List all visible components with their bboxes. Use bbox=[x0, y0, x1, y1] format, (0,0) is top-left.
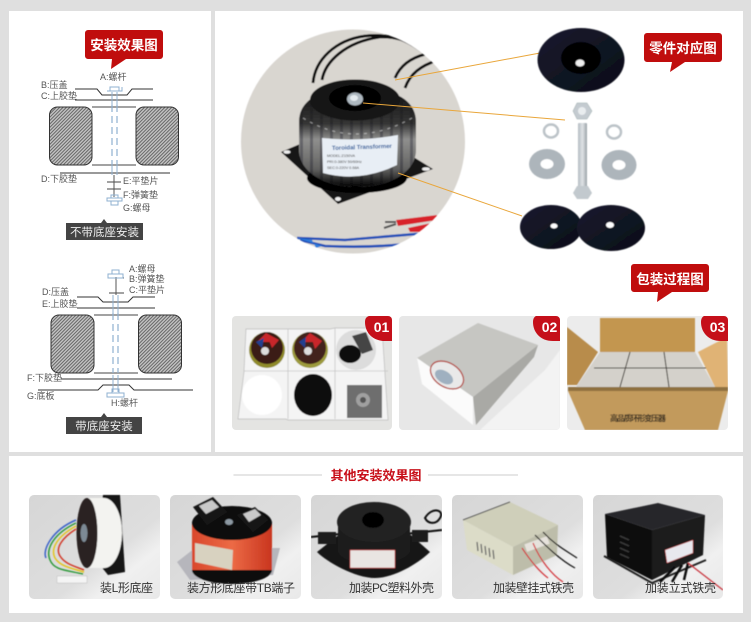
callout: 零件对应图: 零件对应图 bbox=[649, 40, 717, 56]
diagram: installation without base bbox=[41, 71, 178, 213]
diagram: installation with base: F:下胶垫 bbox=[27, 372, 62, 383]
diagram: installation without base: B:压盖 bbox=[41, 79, 68, 90]
diagram: installation without base: C:上胶垫 bbox=[41, 90, 77, 101]
section heading: 其他安装效果图 bbox=[330, 468, 422, 483]
card: L bracket bbox=[29, 495, 160, 599]
photo: toroidal transformer in circle bbox=[241, 30, 465, 254]
card: upright iron case bbox=[593, 495, 723, 599]
diagram: installation with base: A:螺母 bbox=[129, 264, 156, 274]
diagram: installation with base: G:底板 bbox=[27, 390, 55, 401]
packaging photo 03: carton with boxes bbox=[567, 316, 728, 430]
diagram: installation with base: C:平垫片 bbox=[129, 284, 165, 295]
card: PC plastic housing bbox=[311, 495, 442, 599]
diagram: installation with base bbox=[27, 264, 193, 408]
diagram: installation without base: G:螺母 bbox=[123, 203, 151, 213]
packaging photo 01: foam tray: 01 bbox=[374, 319, 389, 335]
packaging photo 02: sealed white box bbox=[399, 316, 560, 430]
packaging photo 03: carton with boxes: 03 bbox=[710, 319, 725, 335]
leader lines bbox=[363, 53, 565, 216]
callout: 安装效果图 bbox=[85, 30, 163, 69]
card: PC plastic housing: 加装PC塑料外壳 bbox=[349, 580, 434, 595]
panel: installation diagrams bbox=[9, 11, 211, 452]
diagram: installation without base: D:下胶垫 bbox=[41, 173, 77, 184]
callout: 零件对应图 bbox=[644, 33, 722, 72]
card: wall-mounted iron case bbox=[452, 495, 583, 599]
packaging photo 01: foam tray bbox=[232, 316, 392, 430]
card: square base with TB terminals: 装方形底座带TB端子 bbox=[187, 580, 295, 595]
label: 带底座安装: 带底座安装 bbox=[75, 419, 133, 433]
diagram: installation with base: B:弹簧垫 bbox=[129, 273, 165, 284]
label: 带底座安装 bbox=[66, 413, 142, 434]
diagram: installation with base: E:上胶垫 bbox=[42, 298, 78, 309]
label: 不带底座安装: 不带底座安装 bbox=[70, 225, 139, 239]
packaging photo 03: carton with boxes: 高品质环形变压器 bbox=[610, 413, 666, 423]
diagram: installation without base: E:平垫片 bbox=[123, 175, 159, 186]
parts: rubber gaskets bbox=[520, 205, 645, 251]
card: upright iron case: 加装立式铁壳 bbox=[645, 580, 716, 595]
card: square base with TB terminals bbox=[170, 495, 301, 599]
parts: top pressure disk bbox=[538, 28, 624, 92]
photo: toroidal transformer in circle: Toroidal Transformer bbox=[332, 144, 393, 152]
label: 不带底座安装 bbox=[66, 219, 143, 240]
card: wall-mounted iron case: 加装壁挂式铁壳 bbox=[493, 580, 574, 595]
callout: 包装过程图: 包装过程图 bbox=[636, 271, 704, 287]
diagram: installation with base: D:压盖 bbox=[42, 286, 69, 297]
callout: 安装效果图: 安装效果图 bbox=[90, 37, 158, 53]
card: L bracket: 装L形底座 bbox=[100, 580, 153, 595]
diagram: installation without base: A:螺杆 bbox=[100, 71, 127, 82]
diagram: installation with base: H:螺杆 bbox=[111, 397, 138, 408]
parts: bolt, nut and washers bbox=[529, 103, 636, 199]
photo: toroidal transformer in circle: MODEL:Z150VA bbox=[327, 154, 355, 158]
callout: 包装过程图 bbox=[631, 264, 709, 302]
packaging photo 02: sealed white box: 02 bbox=[542, 319, 557, 335]
panel: other installation effects bbox=[9, 456, 743, 613]
diagram: installation without base: F:弹簧垫 bbox=[123, 189, 158, 200]
photo: toroidal transformer in circle: PRI:0-380V 50/60Hz bbox=[327, 160, 362, 164]
panel: parts and packaging bbox=[215, 11, 743, 452]
photo: toroidal transformer in circle: SEC:0-220V 0.68A bbox=[327, 166, 360, 170]
